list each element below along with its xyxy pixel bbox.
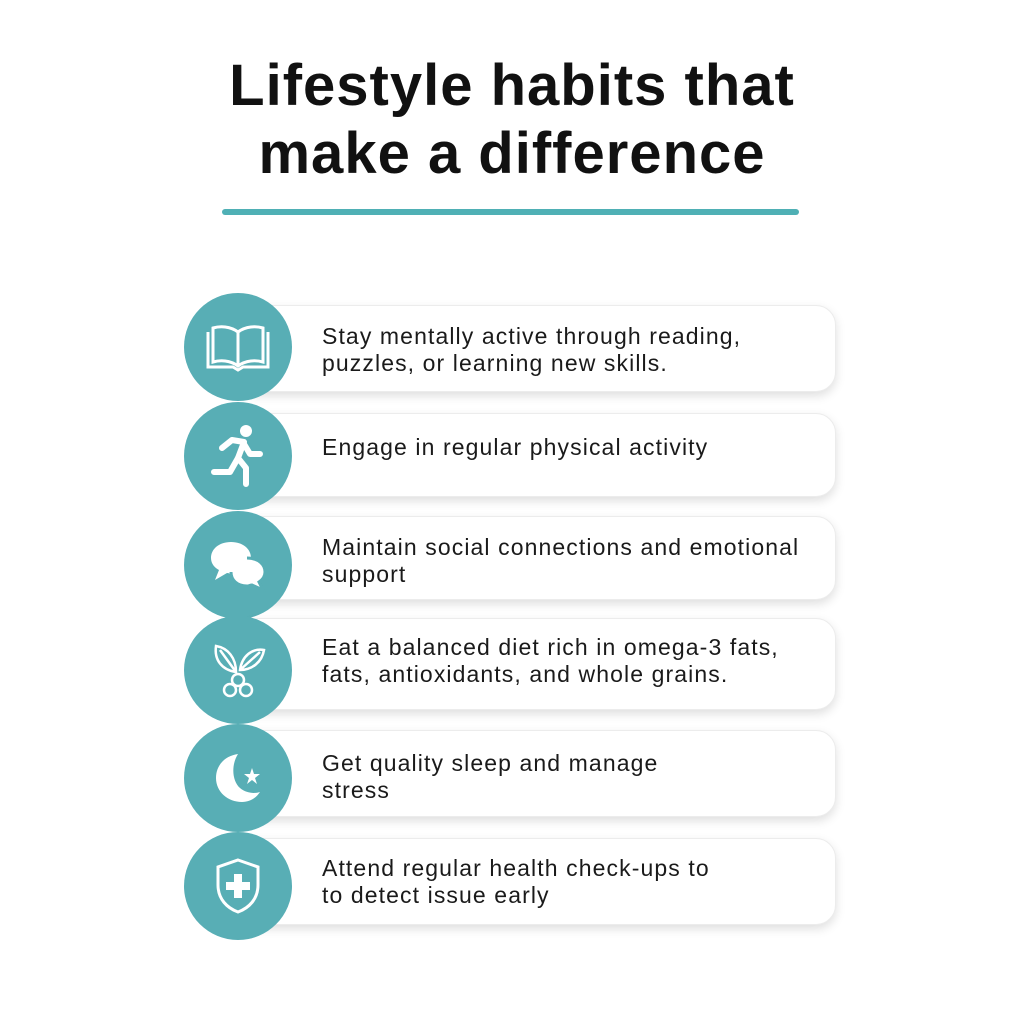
text: Get quality sleep and manage	[322, 750, 658, 776]
title	[229, 53, 795, 186]
row: sleep	[184, 724, 839, 832]
icon: book	[184, 293, 292, 401]
text: to detect issue early	[322, 882, 550, 908]
row: health check-ups	[184, 832, 839, 940]
row: social	[184, 511, 839, 618]
icon: speech bubbles	[184, 511, 292, 619]
text: Stay mentally active through reading,	[322, 323, 741, 349]
text: Eat a balanced diet rich in omega-3 fats,	[322, 634, 779, 660]
icon: shield with cross	[184, 832, 292, 940]
text	[322, 750, 658, 803]
text	[322, 855, 710, 908]
icon: leaves and berries	[184, 616, 292, 724]
text: Engage in regular physical activity	[322, 434, 708, 460]
text	[322, 634, 779, 687]
text: support	[322, 561, 406, 587]
row: physical activity	[184, 402, 839, 510]
text	[322, 534, 799, 587]
text: Attend regular health check-ups to	[322, 855, 710, 881]
title: make a difference	[258, 121, 766, 186]
text	[322, 323, 741, 376]
row: diet	[184, 618, 839, 724]
row: reading	[184, 293, 839, 401]
text: fats, antioxidants, and whole grains.	[322, 661, 728, 687]
title: Lifestyle habits that	[229, 53, 795, 118]
icon: runner	[184, 402, 292, 510]
title underline	[222, 209, 799, 215]
icon: moon and star	[184, 724, 292, 832]
text: stress	[322, 777, 390, 803]
text: Maintain social connections and emotional	[322, 534, 799, 560]
text: puzzles, or learning new skills.	[322, 350, 668, 376]
